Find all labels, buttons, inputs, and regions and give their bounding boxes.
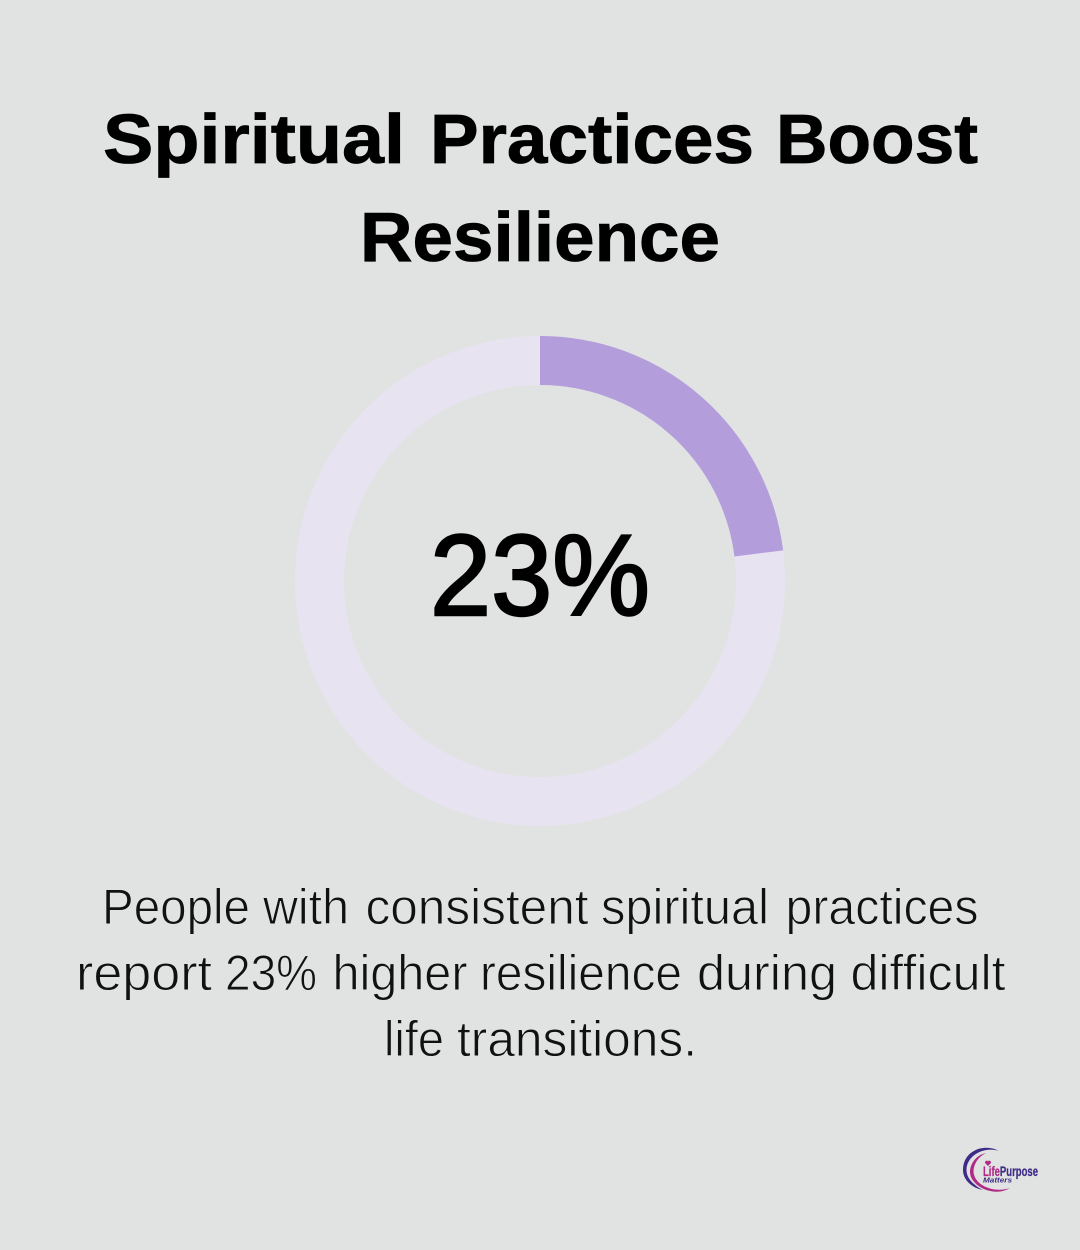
description text: with xyxy=(262,879,349,935)
title: Boost xyxy=(776,100,978,178)
description text: resilience xyxy=(480,945,682,1001)
description text: practices xyxy=(786,879,978,935)
donut chart: 23% xyxy=(320,360,760,802)
description text xyxy=(76,879,1006,1067)
description text: difficult xyxy=(850,945,1006,1001)
title: Resilience xyxy=(360,198,720,276)
logo arcs xyxy=(963,1148,1010,1192)
logo heart xyxy=(985,1161,991,1166)
description text: higher xyxy=(332,945,468,1001)
logo tagline: Matters xyxy=(983,1178,1012,1184)
description text: during xyxy=(697,945,837,1001)
logo wordmark: LifePurpose xyxy=(983,1164,1038,1179)
title: Spiritual xyxy=(103,100,405,178)
description text: transitions. xyxy=(457,1011,697,1067)
description text: People xyxy=(102,879,250,935)
logo: Life Purpose Matters xyxy=(963,1148,1038,1192)
title: Practices xyxy=(430,100,754,178)
description text: 23% xyxy=(225,945,317,1001)
title xyxy=(103,100,978,276)
donut value: 23% xyxy=(430,512,650,640)
description text: consistent xyxy=(366,879,589,935)
description text: report xyxy=(76,945,212,1001)
description text: spiritual xyxy=(601,879,769,935)
description text: life xyxy=(384,1011,444,1067)
